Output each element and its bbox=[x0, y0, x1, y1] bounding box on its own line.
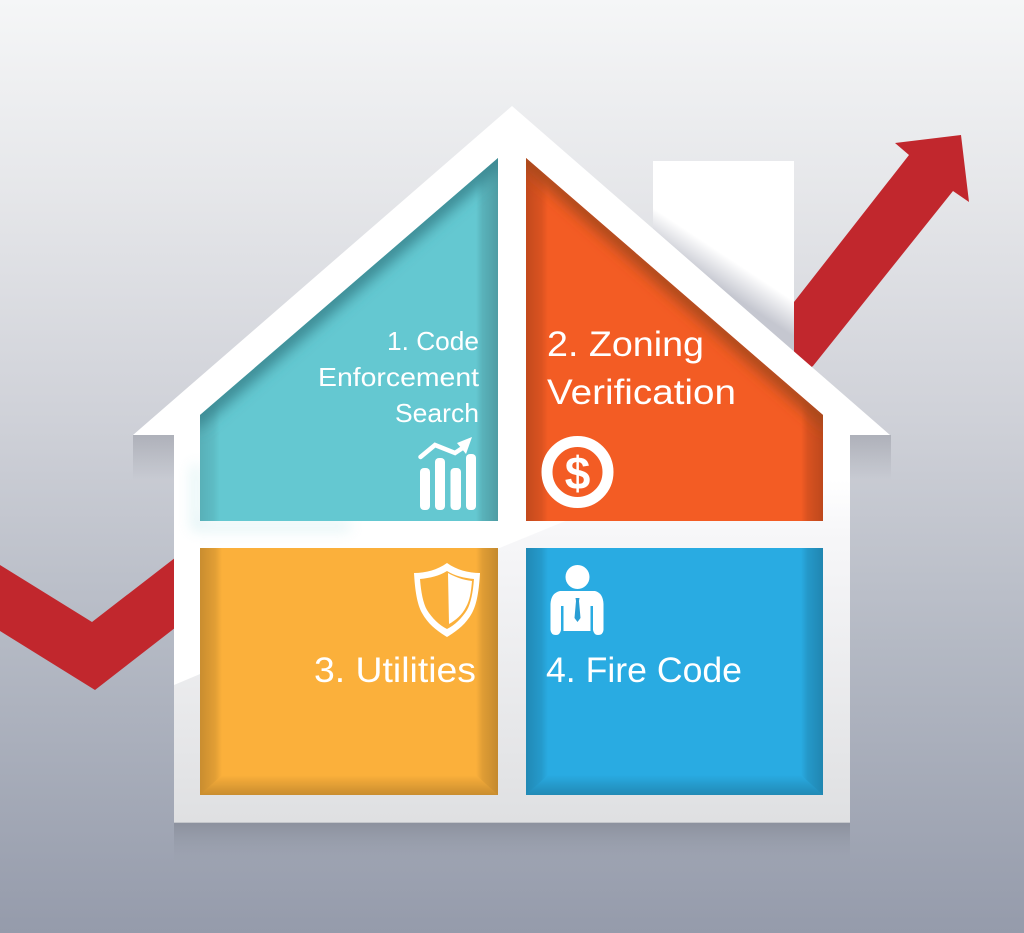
house shadows bbox=[133, 435, 891, 867]
heading: panel 2 bbox=[547, 325, 736, 412]
chimney bbox=[653, 161, 794, 361]
icon: dollar coin bbox=[547, 442, 608, 502]
heading: panel 4: 4. Fire Code bbox=[546, 651, 742, 690]
icon: dollar coin: $ bbox=[565, 447, 590, 499]
heading: panel 1: 1. Code bbox=[387, 326, 479, 356]
panel: 3. Utilities bbox=[200, 548, 498, 795]
panel: 4. Fire Code bbox=[526, 548, 823, 795]
icon: shield bbox=[414, 563, 480, 637]
house outline bbox=[133, 106, 890, 823]
panel: 1. Code Enforcement Search bbox=[190, 149, 508, 521]
heading: panel 1: Enforcement bbox=[318, 362, 480, 392]
icon: person in suit bbox=[550, 565, 604, 635]
icon: bar chart with rising arrow bbox=[420, 437, 476, 510]
heading: panel 3: 3. Utilities bbox=[314, 651, 476, 690]
heading: panel 2: 2. Zoning bbox=[547, 325, 704, 364]
arrow: rising red trend line bbox=[0, 135, 969, 690]
heading: panel 1 bbox=[318, 326, 480, 428]
heading: panel 2: Verification bbox=[547, 373, 736, 412]
panel: 2. Zoning Verification bbox=[516, 149, 833, 521]
heading: panel 1: Search bbox=[395, 398, 479, 428]
